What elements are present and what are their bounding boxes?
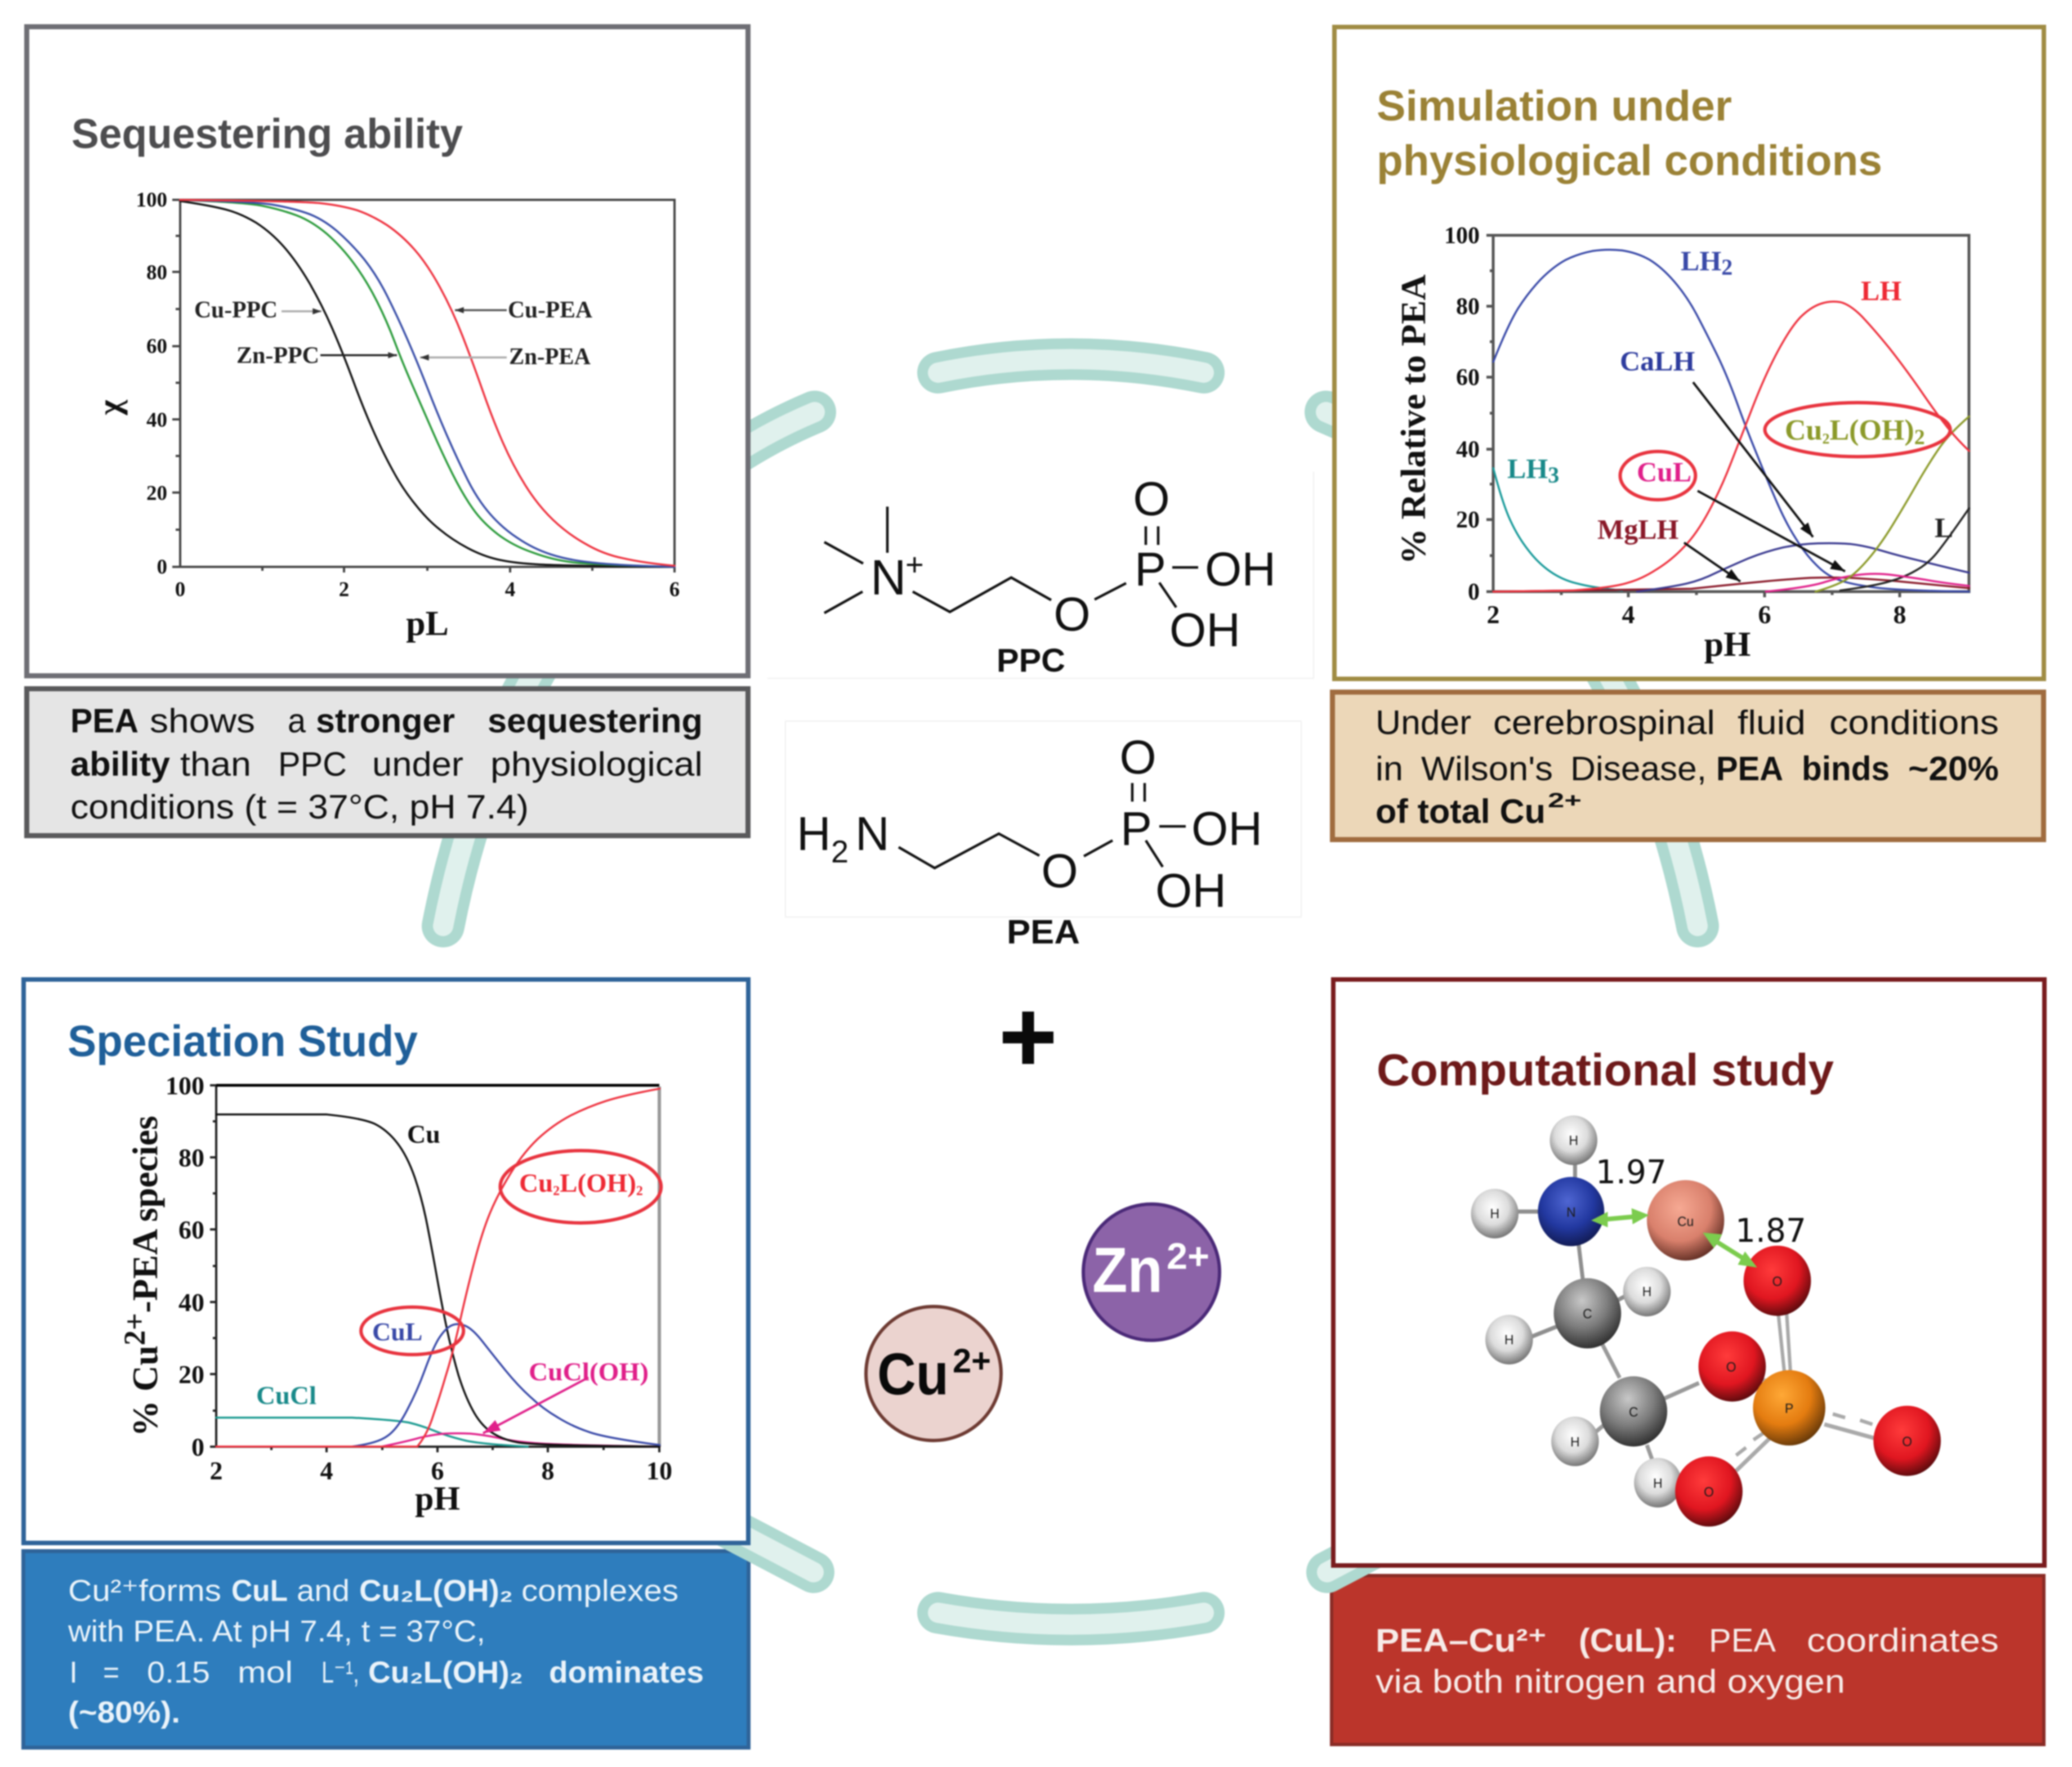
axis tick labels: 2 (339, 578, 349, 601)
caption: sequestering ability (27, 689, 748, 835)
caption text: via both nitrogen and oxygen (1376, 1663, 1845, 1700)
species labels: 2 (1914, 426, 1925, 449)
atoms: OH (1155, 864, 1226, 917)
axis tick labels: 100 (136, 189, 167, 212)
curve labels: Zn-PEA (509, 344, 591, 370)
heading: Speciation Study (68, 1016, 418, 1066)
atom letters: N (1566, 1205, 1576, 1220)
ion circle (866, 1307, 1001, 1441)
species labels: MgLH (1597, 513, 1679, 545)
x axis title: pH (1704, 625, 1751, 664)
curves (180, 200, 675, 567)
caption text: I (69, 1656, 78, 1689)
axis tick labels: 4 (505, 578, 515, 601)
species labels: Cu (1785, 414, 1822, 446)
axis tick labels: 60 (178, 1215, 204, 1244)
atoms (797, 731, 1262, 917)
caption text: (~80%). (68, 1696, 180, 1729)
panel: sequestering ability (27, 27, 748, 676)
bonds (824, 507, 1198, 613)
caption text: PEA (1709, 1622, 1776, 1659)
3D molecular model (1471, 1116, 1941, 1527)
caption text: mol (238, 1656, 293, 1689)
caption text (1376, 704, 1999, 830)
ring segment: lower right (1327, 1506, 1454, 1572)
species labels (256, 1120, 649, 1410)
atom letters (1490, 1133, 1912, 1500)
atom letters: H (1653, 1476, 1663, 1491)
bond distance N-Cu: 1.97 (1596, 1153, 1667, 1191)
caption box (24, 1551, 749, 1747)
species labels: 3 (1548, 462, 1559, 487)
axis tick labels: 8 (542, 1456, 554, 1485)
axis tick labels: 100 (1444, 223, 1480, 249)
atom letters: C (1583, 1307, 1592, 1321)
axis tick labels: 4 (320, 1456, 333, 1485)
axis tick labels: 60 (1456, 365, 1480, 391)
caption text: fluid (1738, 704, 1806, 741)
bonds (1518, 1164, 1875, 1471)
highlight ellipses (1620, 402, 1950, 500)
curves (216, 1089, 661, 1447)
caption box (27, 689, 748, 835)
chart: sequestering curves (91, 189, 680, 643)
caption text: a (288, 702, 306, 740)
caption text: physiological (490, 745, 703, 783)
caption: simulation (1332, 692, 2044, 840)
atom letters: O (1704, 1484, 1714, 1500)
caption text: complexes (521, 1574, 678, 1608)
caption text: Disease, (1570, 750, 1707, 788)
caption text: in (1376, 750, 1403, 788)
atoms: OH (1205, 543, 1276, 596)
atoms: OH (1191, 802, 1262, 855)
curves (1493, 250, 1969, 592)
caption text: CuL (231, 1574, 288, 1608)
species labels: L (1935, 512, 1953, 543)
axis tick labels: 6 (1758, 600, 1771, 629)
distance arrows (1592, 1209, 1756, 1267)
species labels: CuL (1637, 456, 1691, 487)
atom letters: H (1504, 1332, 1514, 1347)
species labels: LH (1681, 245, 1721, 276)
caption text: Wilson's (1421, 750, 1553, 788)
axis tick labels: 40 (146, 409, 167, 432)
ion charge: 2+ (953, 1342, 991, 1380)
structure frame (785, 721, 1301, 917)
caption text: conditions (1829, 704, 1999, 741)
curve labels: Cu-PEA (508, 297, 593, 323)
caption text (1376, 1622, 1999, 1700)
PPC structure (767, 472, 1314, 679)
x axis title: pL (406, 605, 449, 643)
heading (1377, 82, 1882, 185)
axis tick labels: 10 (646, 1456, 672, 1485)
ion charge: 2+ (1167, 1235, 1209, 1277)
species labels: 2 (1822, 431, 1829, 447)
caption text: sequestering (488, 702, 703, 740)
caption: computational study (1332, 1576, 2044, 1744)
caption text: of total Cu (1376, 793, 1546, 830)
atoms: O (1053, 588, 1091, 641)
caption text: binds (1802, 750, 1890, 788)
panel frame (27, 27, 748, 676)
y axis title: 2+ (118, 1313, 151, 1345)
axis tick labels: 20 (178, 1360, 204, 1389)
axis tick labels (1444, 223, 1906, 629)
PEA structure (785, 721, 1301, 951)
axis tick labels: 80 (178, 1143, 204, 1172)
chart: distribution relative to PEA (1395, 223, 1969, 664)
atoms: + (905, 547, 924, 582)
caption text: Cu₂L(OH)₂ (368, 1656, 523, 1689)
ring segment: upper left (443, 412, 815, 926)
chart: Cu-PEA speciation (118, 1071, 672, 1517)
y axis title: % Relative to PEA (1395, 274, 1433, 564)
axis tick labels: 6 (669, 578, 680, 601)
y axis title: χ (91, 399, 128, 415)
axis tick labels: 60 (146, 335, 167, 358)
ion circle (1083, 1204, 1220, 1340)
atom letters: O (1726, 1359, 1736, 1375)
atom letters: H (1642, 1284, 1651, 1299)
species labels (1507, 245, 1953, 545)
axis tick labels: 100 (166, 1071, 204, 1100)
atoms: OH (1169, 603, 1240, 656)
cycle arrows ring (443, 359, 1698, 1625)
axes (1486, 235, 1969, 597)
axes (210, 1085, 659, 1452)
caption text: shows (150, 702, 255, 740)
name: PPC (997, 642, 1065, 679)
species labels: L(OH) (1829, 414, 1914, 446)
axis tick labels: 6 (431, 1456, 444, 1485)
ring segment: top (938, 359, 1204, 373)
atom letters: P (1785, 1401, 1793, 1416)
atoms: P (1135, 543, 1166, 596)
atoms: 2 (831, 834, 849, 869)
bonds (899, 783, 1186, 868)
axis tick labels: 0 (157, 556, 167, 579)
atom letters: Cu (1677, 1214, 1694, 1229)
heading: Sequestering ability (72, 110, 463, 157)
atoms: P (1120, 802, 1152, 855)
axis tick labels: 8 (1893, 600, 1906, 629)
species labels: LH (1507, 453, 1548, 484)
axis tick labels: 0 (1468, 579, 1480, 605)
axis tick labels: 40 (178, 1288, 204, 1317)
caption text: cerebrospinal (1493, 704, 1715, 741)
caption text (68, 1574, 704, 1729)
caption text: PEA–Cu²⁺ (1376, 1622, 1547, 1659)
atoms: O (1041, 844, 1078, 897)
caption text: PEA (70, 702, 139, 740)
caption text: 2+ (1548, 789, 1582, 812)
axes (172, 200, 675, 572)
bond distance Cu-O: 1.87 (1735, 1211, 1806, 1250)
axis tick labels: 2 (1486, 600, 1500, 629)
axis tick labels (166, 1071, 672, 1485)
caption text: = (103, 1656, 119, 1689)
axis tick labels: 80 (146, 261, 167, 284)
atom letters: H (1569, 1133, 1578, 1148)
y axis title: % Cu (125, 1345, 165, 1437)
structure frame (767, 472, 1314, 678)
species labels: CaLH (1620, 345, 1695, 377)
axis tick labels: 80 (1456, 294, 1480, 320)
species labels: Cu (519, 1169, 553, 1198)
curve labels: Zn-PPC (236, 343, 319, 369)
caption text: conditions (t = 37°C, pH 7.4) (70, 788, 529, 826)
ring segment: bottom (938, 1613, 1204, 1625)
axis tick labels: 20 (1456, 507, 1480, 533)
atoms: O (1133, 472, 1170, 525)
panel: simulation under physiological conditions (1334, 27, 2044, 679)
zinc ion (1083, 1204, 1220, 1340)
caption text: ~20% (1908, 750, 1999, 788)
atoms: O (1119, 731, 1156, 784)
atom letters: O (1902, 1434, 1912, 1449)
caption text (70, 702, 703, 826)
atoms: N (870, 549, 906, 605)
axis tick labels: 0 (191, 1433, 204, 1461)
atoms: H (797, 807, 831, 860)
caption text: 0.15 (147, 1656, 210, 1689)
atom letters: H (1570, 1434, 1580, 1450)
leader arrows (282, 310, 507, 357)
axis tick labels: 20 (146, 482, 167, 505)
frame top and right (216, 1084, 659, 1086)
caption text: with PEA. At pH 7.4, t = 37°C, (68, 1614, 485, 1648)
caption text: L⁻¹, (321, 1656, 359, 1689)
ring segment: lower left (687, 1506, 814, 1572)
highlight ellipses (361, 1151, 661, 1354)
species labels: L(OH) (560, 1169, 636, 1198)
name: PEA (1007, 913, 1080, 951)
ring segment: upper right (1326, 412, 1698, 926)
panel frame (1334, 27, 2044, 679)
curve labels: Cu-PPC (194, 297, 278, 323)
species labels: 2 (553, 1184, 560, 1198)
heading: Simulation under (1377, 82, 1732, 130)
species labels: CuCl (256, 1381, 316, 1410)
species labels: 2 (636, 1184, 643, 1198)
caption text: and (297, 1574, 350, 1608)
atom letters: C (1629, 1404, 1638, 1420)
leader arrow (483, 1377, 588, 1433)
atoms (870, 472, 1276, 656)
caption: speciation study (24, 1551, 749, 1747)
panel frame (1333, 979, 2044, 1565)
copper ion (866, 1307, 1001, 1441)
caption text: (CuL): (1579, 1622, 1677, 1659)
species labels: Cu (407, 1120, 440, 1148)
caption text: PEA (1716, 750, 1783, 788)
ion label: Cu (877, 1341, 949, 1407)
atoms (1471, 1116, 1941, 1527)
plus sign (1003, 1012, 1053, 1064)
panel frame (24, 979, 748, 1543)
species labels: LH (1861, 275, 1901, 306)
caption text: ability (70, 745, 171, 783)
atom letters: O (1772, 1274, 1782, 1289)
axis tick labels: 2 (209, 1456, 223, 1485)
panel: speciation study (24, 979, 748, 1543)
caption text: PPC (278, 745, 347, 783)
caption box (1332, 692, 2044, 840)
caption text: under (372, 745, 463, 783)
axis tick labels: 40 (1456, 437, 1480, 463)
caption box (1332, 1576, 2044, 1744)
caption text: Cu₂L(OH)₂ (359, 1574, 513, 1608)
heading: Computational study (1377, 1045, 1834, 1095)
ion label: Zn (1092, 1234, 1163, 1305)
curve labels (194, 297, 593, 370)
heading: physiological conditions (1377, 137, 1882, 185)
species labels: CuL (372, 1317, 422, 1346)
axis tick labels: 0 (175, 578, 185, 601)
panel: computational study (1333, 979, 2044, 1565)
caption text: dominates (549, 1656, 704, 1689)
caption text: Under (1376, 704, 1471, 741)
axis tick labels (136, 189, 680, 601)
axis tick labels: 4 (1622, 600, 1635, 629)
species labels: CuCl(OH) (529, 1357, 649, 1386)
caption text: Cu²⁺forms (68, 1574, 221, 1608)
atom letters: H (1490, 1206, 1499, 1221)
atoms: N (855, 807, 890, 860)
caption text: coordinates (1807, 1622, 1999, 1659)
x axis title: pH (415, 1480, 460, 1517)
species labels: 2 (1721, 254, 1732, 280)
y axis title: -PEA species (125, 1116, 165, 1313)
caption text: stronger (316, 702, 455, 740)
leader arrows (1684, 382, 1845, 581)
caption text: than (180, 745, 251, 783)
